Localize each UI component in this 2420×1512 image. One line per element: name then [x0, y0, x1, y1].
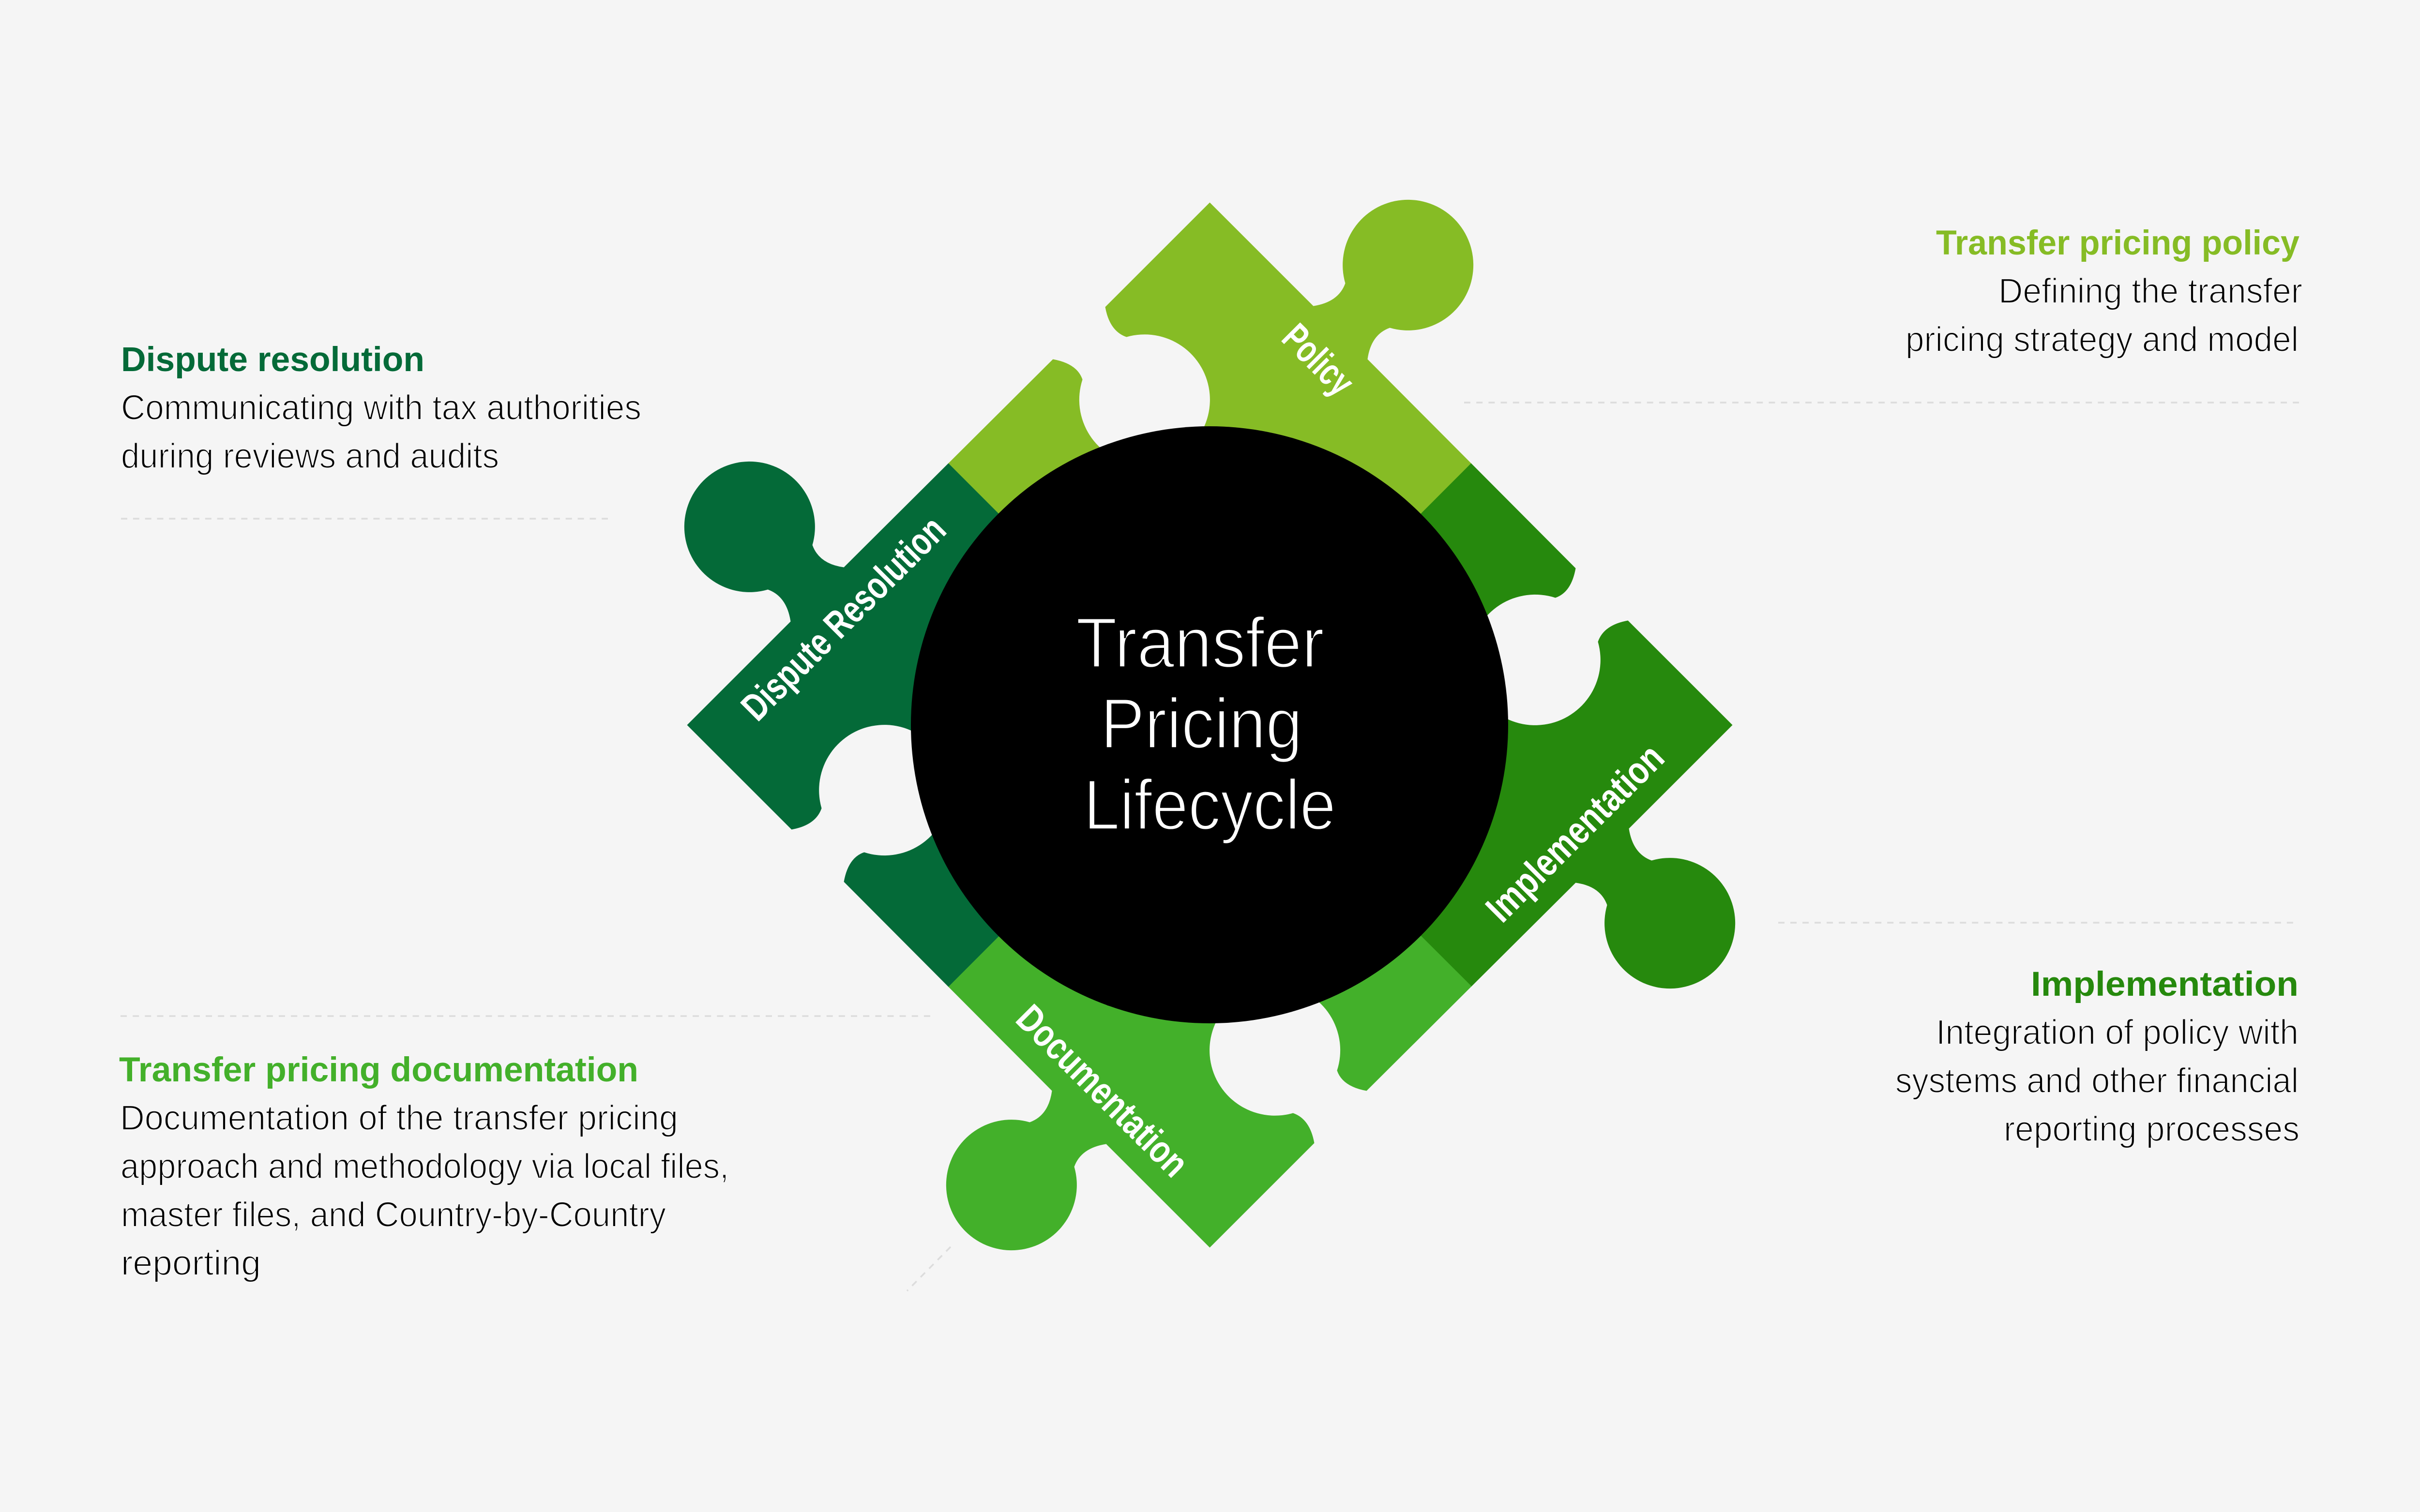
text block: Transfer pricing policy: Transfer pricing policy	[1936, 224, 2300, 262]
text block: Transfer pricing documentation: Transfer pricing documentation	[119, 1051, 638, 1089]
centre circle with title	[911, 426, 1508, 1023]
puzzle piece: Documentation	[946, 725, 1471, 1250]
text block: Implementation: Implementation	[2031, 965, 2299, 1003]
text block: Dispute resolution: Communicating with tax authorities	[121, 389, 641, 427]
text block: Implementation: reporting processes	[2004, 1110, 2299, 1149]
text block: Implementation: systems and other financial	[1895, 1062, 2299, 1100]
text block: Implementation	[1895, 965, 2299, 1149]
puzzle piece: Implementation	[1210, 464, 1735, 988]
centre circle with title: Lifecycle	[1084, 765, 1336, 845]
text block: Transfer pricing documentation: reporting	[121, 1244, 261, 1283]
text block: Transfer pricing documentation: Documentation of the transfer pricing	[120, 1099, 678, 1138]
text block: Implementation: Integration of policy with	[1936, 1013, 2299, 1052]
centre circle with title: Pricing	[1101, 684, 1302, 763]
text block: Transfer pricing policy: pricing strategy and model	[1906, 320, 2299, 359]
text block: Dispute resolution: Dispute resolution	[121, 341, 424, 379]
puzzle piece: Policy	[948, 200, 1473, 725]
text block: Transfer pricing policy: Defining the transfer	[1998, 272, 2302, 311]
text block: Dispute resolution: during reviews and audits	[121, 437, 499, 476]
puzzle piece: Implementation: Implementation	[1478, 735, 1672, 930]
text block: Transfer pricing documentation: approach and methodology via local files,	[121, 1147, 729, 1186]
puzzle piece: Policy: Policy	[1274, 315, 1363, 404]
centre circle with title: Transfer	[1076, 603, 1324, 683]
text block: Transfer pricing policy	[1906, 224, 2302, 359]
puzzle piece: Dispute Resolution	[684, 462, 1210, 987]
puzzle piece: Dispute Resolution: Dispute Resolution	[733, 508, 954, 729]
text block: Transfer pricing documentation: master files, and Country-by-Country	[121, 1196, 666, 1234]
text block: Transfer pricing documentation	[119, 1051, 729, 1283]
puzzle piece: Documentation: Documentation	[1008, 996, 1197, 1185]
text block: Dispute resolution	[121, 341, 641, 476]
